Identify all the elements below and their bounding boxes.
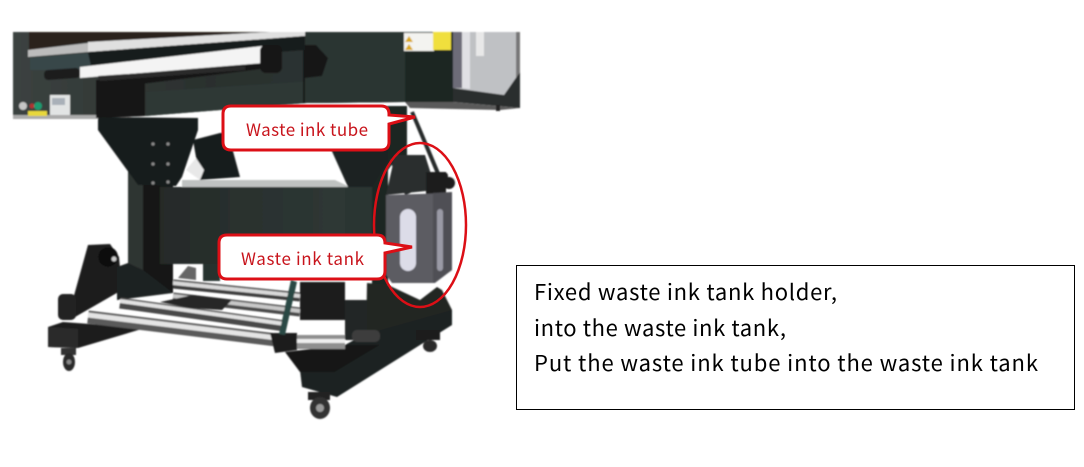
left foot and base [48,322,145,371]
instruction text box [516,266,1074,410]
tank holder [386,155,455,195]
waste ink tank [386,192,452,283]
stand column and beam [128,106,407,293]
warning labels [404,32,451,51]
callout: waste ink tube [223,106,415,150]
highlight ellipse: tank [374,143,466,307]
black mounting bracket [98,117,198,186]
callout: waste ink tube: Waste ink tube [246,116,368,141]
waste ink tube [392,112,440,194]
instruction text box: Put the waste ink tube into the waste ink tank [534,346,1038,378]
instruction text box: Fixed waste ink tank holder, [534,275,837,307]
top window and strips [28,32,305,70]
callout: waste ink tank [219,235,412,279]
fan unit behind stand [186,133,240,180]
callout: waste ink tank: Waste ink tank [241,245,365,270]
right post and base [285,283,452,419]
grey door box [405,32,520,111]
winding roller bracket [58,244,173,320]
rear rods [173,263,300,312]
printer photo [13,32,520,419]
control panel [19,95,70,116]
instruction text box: into the waste ink tank, [534,311,786,343]
front rods [88,280,380,353]
upper body [13,32,453,119]
white roller [44,45,282,88]
